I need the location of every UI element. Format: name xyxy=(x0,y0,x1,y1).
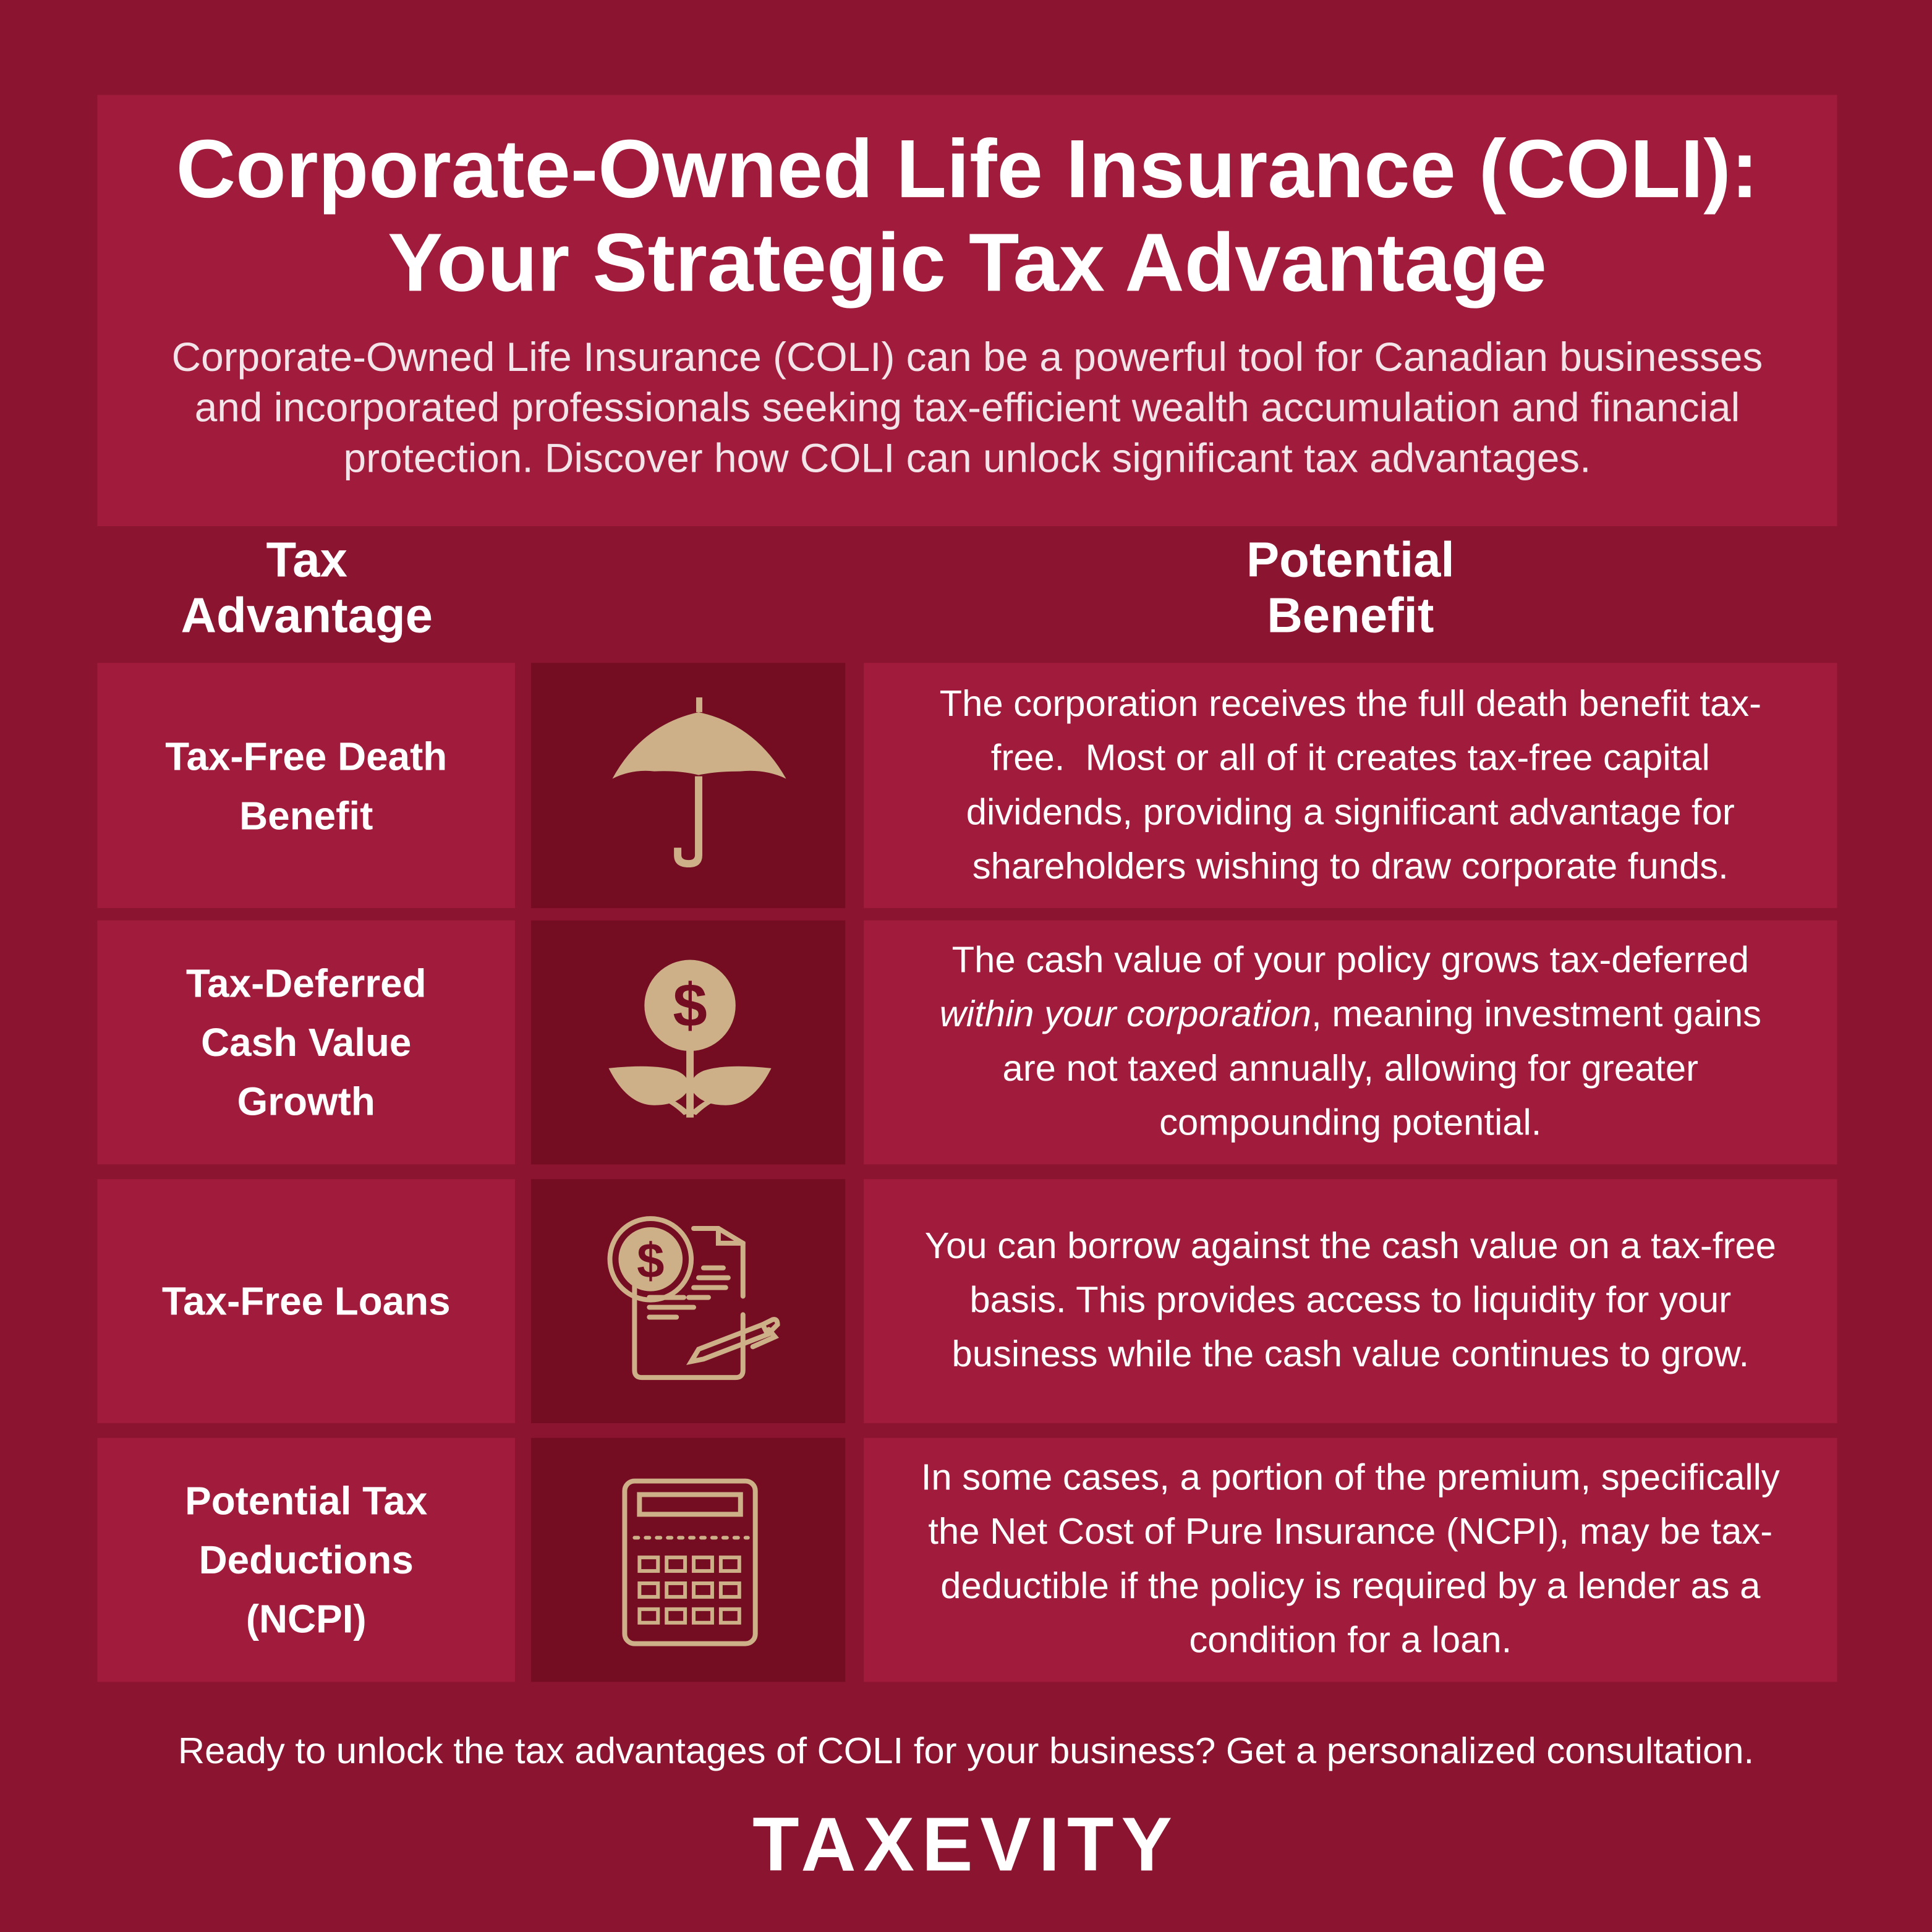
title: Corporate-Owned Life Insurance (COLI): xyxy=(176,123,1758,216)
row 2 label: Tax-Deferred xyxy=(186,961,427,1005)
row 1 text: shareholders wishing to draw corporate funds. xyxy=(972,846,1729,887)
row 1 text: free. Most or all of it creates tax-free capital xyxy=(991,738,1710,778)
heading: Tax Advantage: Tax xyxy=(266,534,347,588)
row 4 text: In some cases, a portion of the premium, specifically xyxy=(921,1458,1780,1498)
heading: Potential Benefit xyxy=(1246,534,1455,643)
row 2 label: Cash Value xyxy=(201,1020,411,1065)
row 1 label xyxy=(97,663,515,908)
row 2 label xyxy=(97,921,515,1164)
footer call to action: Ready to unlock the tax advantages of COLI for your business? Get a personalized consultation. xyxy=(178,1731,1754,1772)
row 2 text: The cash value of your policy grows tax-deferred xyxy=(952,940,1749,981)
header panel xyxy=(97,95,1837,526)
row 4 label: Potential Tax xyxy=(185,1479,427,1523)
heading: Tax Advantage xyxy=(181,534,433,643)
row 1 text: dividends, providing a significant advantage for xyxy=(966,791,1735,832)
row 4 icon: calculator xyxy=(531,1438,845,1682)
row 2 icon: money plant: $ xyxy=(673,971,707,1040)
subtitle xyxy=(172,334,1763,480)
row 3 text: You can borrow against the cash value on a tax-free xyxy=(925,1226,1776,1267)
logo: TAXEVITY: TAXEVITY xyxy=(752,1803,1180,1887)
heading: Tax Advantage: Advantage xyxy=(181,589,433,643)
row 4 text: deductible if the policy is required by a lender as a xyxy=(940,1566,1760,1607)
subtitle: protection. Discover how COLI can unlock significant tax advantages. xyxy=(344,435,1591,480)
row 4 text: condition for a loan. xyxy=(1189,1620,1512,1661)
row 2 text: compounding potential. xyxy=(1159,1103,1541,1143)
row 4 label: Deductions xyxy=(199,1538,414,1582)
row 2 icon: money plant xyxy=(531,921,845,1164)
row 3 text: basis. This provides access to liquidity for your xyxy=(969,1280,1731,1321)
row 4 text xyxy=(864,1438,1837,1682)
row 1 label: Tax-Free Death xyxy=(165,734,447,778)
row 3 icon: loan document: $ xyxy=(637,1233,664,1288)
title: Your Strategic Tax Advantage xyxy=(388,217,1547,309)
heading: Potential Benefit: Potential xyxy=(1246,534,1455,588)
row 3 icon: loan document xyxy=(531,1179,845,1423)
row 4 label xyxy=(97,1438,515,1682)
row 2 label: Growth xyxy=(237,1079,375,1124)
row 2 text: are not taxed annually, allowing for greater xyxy=(1002,1049,1698,1089)
row 4 text: the Net Cost of Pure Insurance (NCPI), may be tax- xyxy=(928,1512,1772,1552)
row 2 text: within your corporation, meaning investment gains xyxy=(940,994,1761,1035)
heading: Potential Benefit: Benefit xyxy=(1267,589,1434,643)
row 4 label: (NCPI) xyxy=(246,1597,367,1641)
title xyxy=(176,123,1758,309)
row 1 icon: umbrella xyxy=(531,663,845,908)
row 1 text: The corporation receives the full death benefit tax- xyxy=(940,683,1761,724)
row 1 text xyxy=(864,663,1837,908)
subtitle: Corporate-Owned Life Insurance (COLI) can be a powerful tool for Canadian businesses xyxy=(172,334,1763,380)
row 3 text xyxy=(864,1179,1837,1423)
row 3 text: business while the cash value continues to grow. xyxy=(952,1334,1749,1375)
row 1 label: Benefit xyxy=(239,793,373,837)
subtitle: and incorporated professionals seeking tax-efficient wealth accumulation and financial xyxy=(195,385,1740,430)
row 2 text xyxy=(864,921,1837,1164)
row 3 label: Tax-Free Loans xyxy=(162,1279,451,1323)
row 3 label xyxy=(97,1179,515,1423)
